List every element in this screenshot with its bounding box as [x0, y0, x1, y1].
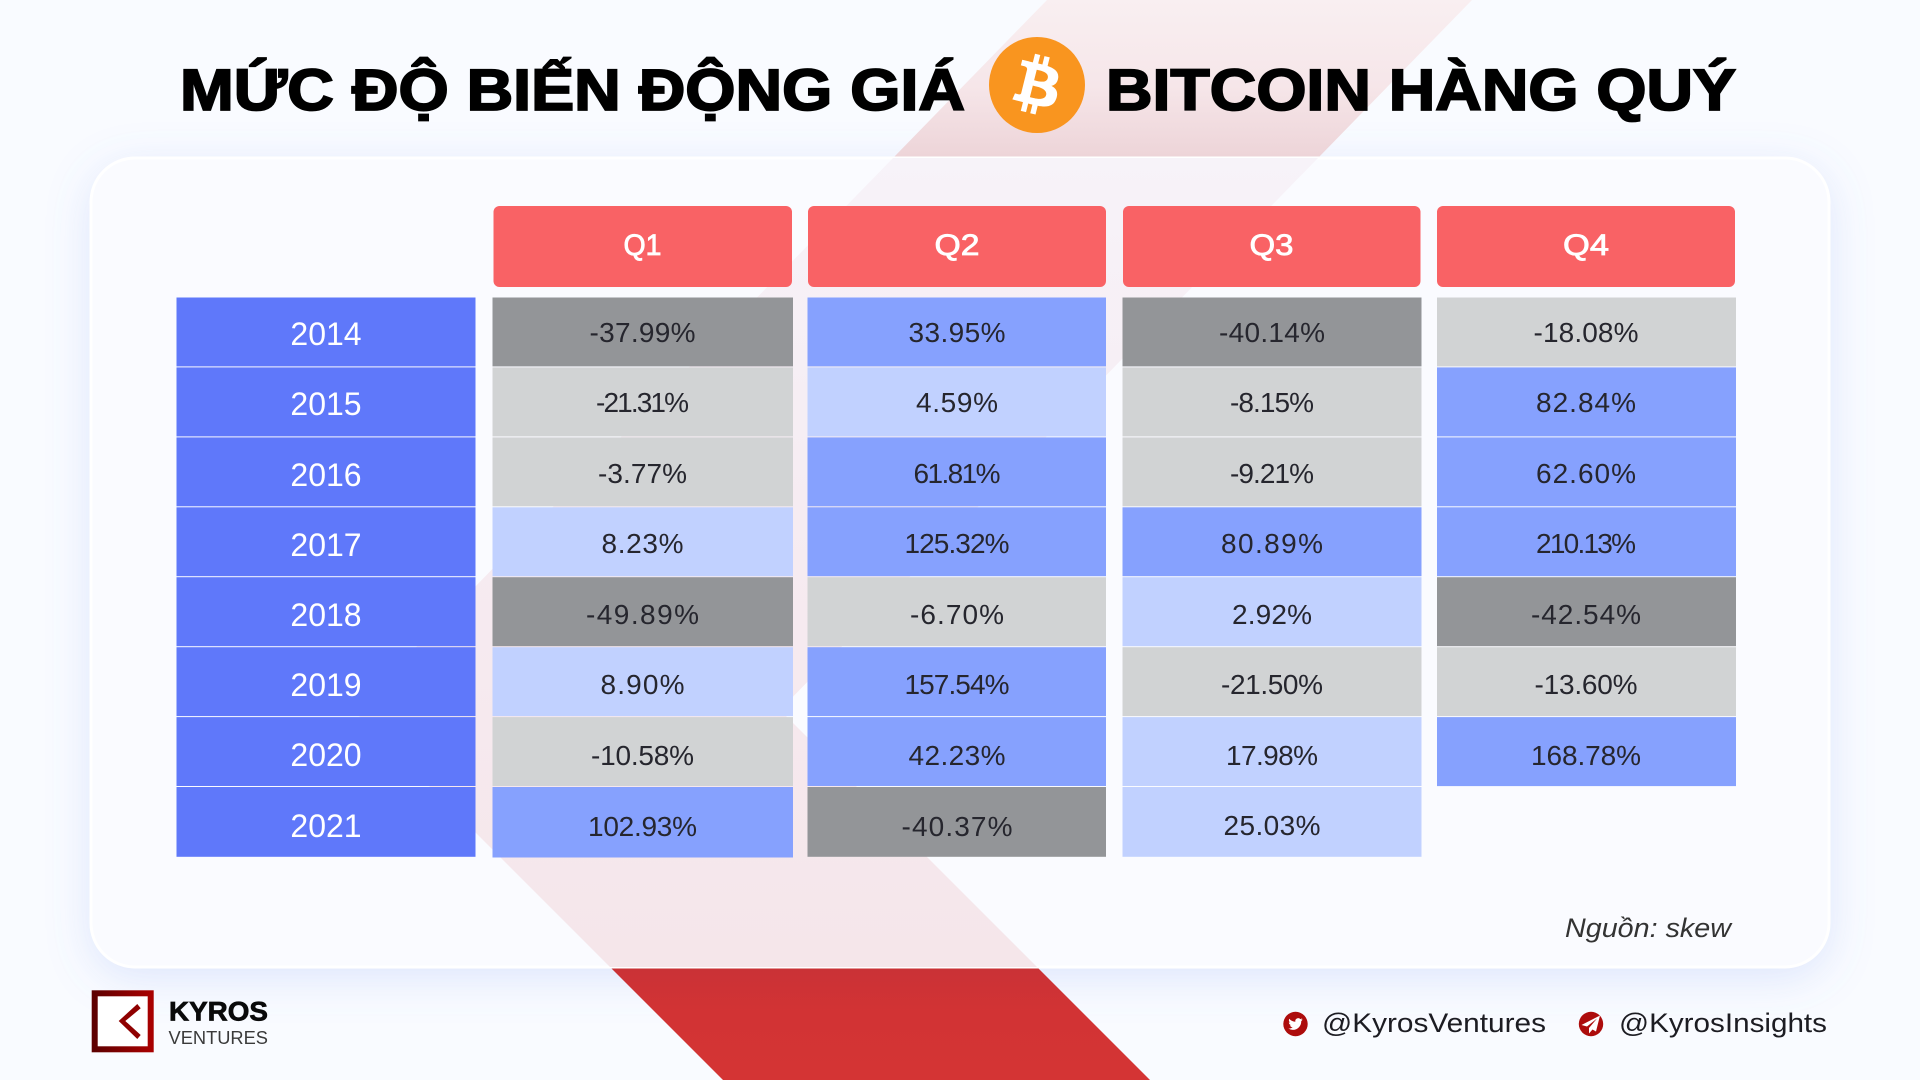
card shadow [91, 158, 1829, 967]
column: Q2 values: 61.81% [914, 458, 1000, 489]
column: Q1 values: -21.31% [596, 387, 689, 418]
column: years: 2019 [290, 667, 362, 703]
column: Q1 values: -10.58% [591, 740, 694, 771]
header: Q3 [1123, 206, 1420, 287]
header: Q4: Q4 [1563, 229, 1609, 262]
column: years [176, 298, 476, 857]
column: Q4 values: 82.84% [1536, 387, 1636, 418]
column: Q3 values: -9.21% [1230, 458, 1314, 489]
icon: logo mark [95, 993, 151, 1049]
column: Q4 values: -42.54% [1531, 599, 1641, 630]
background chevron: lower red band [611, 968, 1150, 1080]
column: Q3 values: -40.14% [1219, 317, 1325, 348]
icon: twitter [1283, 1012, 1308, 1036]
column: Q4 values: -18.08% [1534, 317, 1638, 348]
column: years: 2014 [290, 316, 362, 352]
column: Q2 values [808, 298, 1106, 857]
column: Q2 values: 125.32% [904, 528, 1010, 559]
social: twitter: @KyrosVentures [1322, 1008, 1546, 1038]
logo: Kyros Ventures: KYROS [169, 997, 268, 1027]
icon: bitcoin logo [989, 37, 1085, 133]
column: years: 2021 [290, 808, 362, 844]
column: Q1 values: -3.77% [598, 458, 687, 489]
column: Q1 values [492, 298, 793, 858]
background chevron: upper band [894, 0, 1472, 157]
column: Q1 values: 8.23% [602, 528, 684, 559]
column: Q3 values: -21.50% [1221, 669, 1323, 700]
column: Q1 values: 8.90% [600, 669, 684, 700]
column: Q3 values [1122, 298, 1422, 857]
title: BITCOIN HÀNG QUÝ [1106, 58, 1736, 123]
column: Q2 values: 157.54% [904, 669, 1010, 700]
column: Q2 values: -40.37% [902, 811, 1012, 842]
logo: Kyros Ventures: VENTURES [168, 1027, 268, 1048]
column: Q3 values: 2.92% [1232, 599, 1312, 630]
column: Q3 values: 25.03% [1224, 810, 1320, 841]
logo: Kyros Ventures [95, 993, 268, 1049]
header: Q3: Q3 [1250, 229, 1294, 262]
column: years: 2015 [290, 386, 362, 422]
icon: telegram [1579, 1012, 1603, 1036]
column: Q1 values: 102.93% [588, 811, 697, 842]
column: Q3 values: -8.15% [1230, 387, 1314, 418]
column: Q2 values: 42.23% [908, 740, 1006, 771]
column: Q2 values: -6.70% [910, 599, 1004, 630]
column: Q4 values [1437, 298, 1736, 786]
title: MỨC ĐỘ BIẾN ĐỘNG GIÁ [180, 58, 965, 123]
title [180, 37, 1736, 133]
column: Q4 values: -13.60% [1534, 669, 1638, 700]
header: Q1: Q1 [624, 229, 662, 262]
header: Q2 [808, 206, 1106, 287]
column: Q3 values: 17.98% [1226, 740, 1318, 771]
column: Q1 values: -37.99% [590, 317, 696, 348]
column: Q1 values: -49.89% [586, 599, 699, 630]
column: Q3 values: 80.89% [1221, 528, 1323, 559]
header: Q4 [1437, 206, 1735, 287]
column: Q4 values: 168.78% [1531, 740, 1641, 771]
social: telegram: @KyrosInsights [1619, 1008, 1827, 1038]
column: years: 2020 [290, 737, 362, 773]
column: Q4 values: 62.60% [1536, 458, 1636, 489]
column: Q2 values: 4.59% [916, 387, 998, 418]
header: Q1 [494, 206, 792, 287]
column: years: 2018 [290, 597, 362, 633]
source note: Nguồn: skew [1565, 913, 1733, 943]
panel: table card [90, 156, 1830, 968]
column: years: 2016 [290, 457, 362, 493]
column: Q2 values: 33.95% [908, 317, 1006, 348]
column: Q4 values: 210.13% [1536, 528, 1636, 559]
header: Q2: Q2 [934, 229, 980, 262]
column: years: 2017 [290, 527, 362, 563]
